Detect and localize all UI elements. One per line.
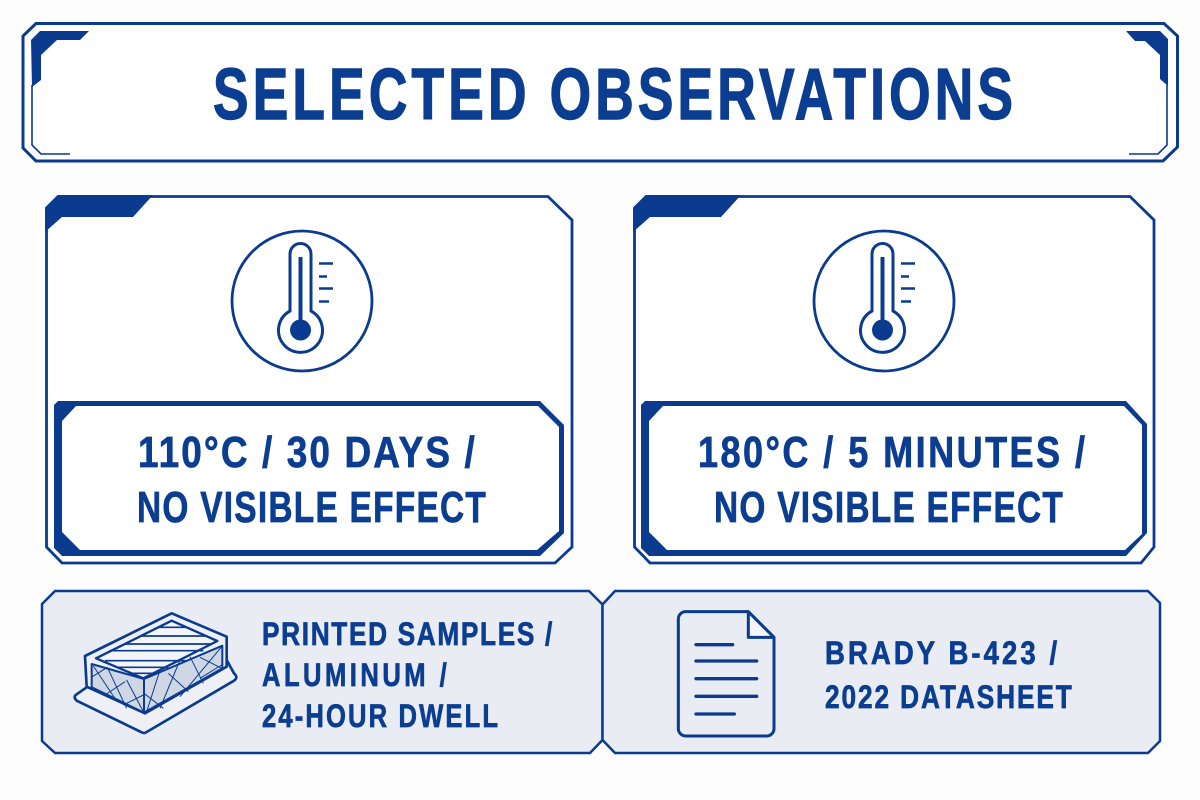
result text: 180°C / 5 MINUTES / <box>698 428 1085 477</box>
corner accent <box>633 195 741 232</box>
icon: thermometer <box>814 231 954 371</box>
setup text: PRINTED SAMPLES / <box>262 618 552 653</box>
result box <box>641 401 1147 556</box>
corner line: bottom right <box>1129 85 1167 154</box>
panel: test setup <box>42 591 602 753</box>
source text: 2022 DATASHEET <box>825 681 1072 716</box>
result box: NO VISIBLE EFFECT <box>137 484 486 532</box>
result box <box>54 401 564 556</box>
corner line: bottom left <box>32 85 70 154</box>
setup text: ALUMINUM / <box>262 658 447 694</box>
corner accent: top right <box>1126 31 1168 86</box>
panel: 110°C observation <box>45 195 572 563</box>
setup text <box>262 618 552 735</box>
panel: datasheet source <box>602 591 1160 753</box>
setup text: 24-HOUR DWELL <box>262 699 498 735</box>
panel: title banner <box>23 24 1178 161</box>
icon: document <box>678 612 774 736</box>
result box: NO VISIBLE EFFECT <box>714 484 1063 532</box>
panel: 180°C observation <box>633 195 1154 563</box>
title: SELECTED OBSERVATIONS <box>213 55 1013 135</box>
source text <box>825 636 1072 716</box>
corner accent: top left <box>31 31 89 87</box>
icon: printed sample block <box>75 613 236 733</box>
result text: 110°C / 30 DAYS / <box>138 427 475 477</box>
icon: thermometer <box>232 231 372 371</box>
corner accent <box>45 195 153 232</box>
source text: BRADY B-423 / <box>825 636 1057 672</box>
